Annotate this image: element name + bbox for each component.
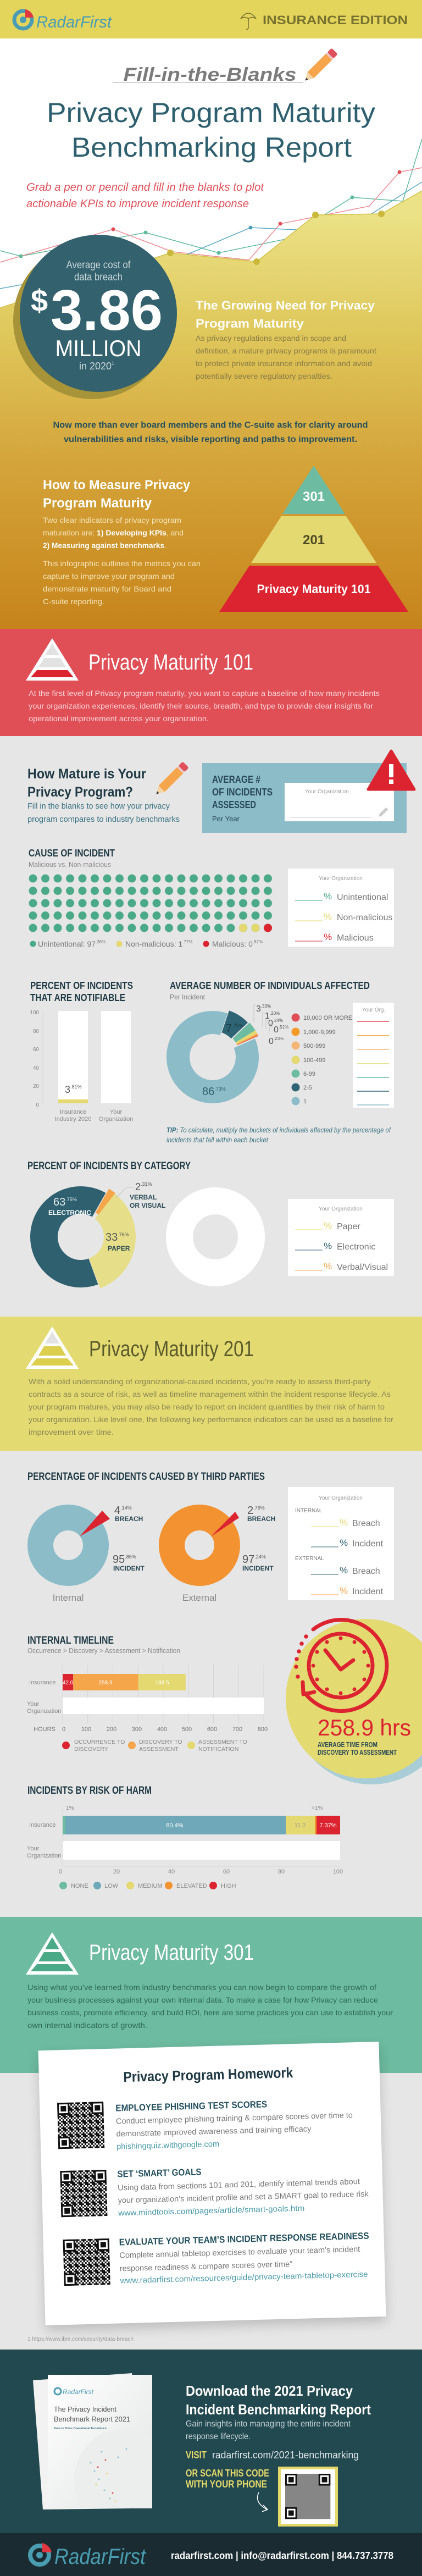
- chart: cause of incident dot grid: .87%: [253, 939, 263, 944]
- text block: how to measure: demonstrate maturity for Board and: [43, 584, 171, 593]
- chart: internal donut: BREACH: [115, 1515, 143, 1523]
- text block: how to measure: Two clear indicators of privacy program: [43, 516, 181, 524]
- main title: Benchmarking Report: [71, 132, 352, 163]
- chart: cause of incident dot grid: CAUSE OF INCIDENT: [29, 848, 115, 859]
- chart: incidents by risk of harm: 7.37%: [319, 1822, 337, 1829]
- chart: cause of incident dot grid: Unintentional: 97: [38, 939, 96, 948]
- chart: average individuals affected donut: 86: [202, 1086, 214, 1098]
- arrow: [258, 2492, 268, 2512]
- panel: your organization cause: %: [324, 932, 332, 942]
- chart: internal timeline: 500: [182, 1726, 192, 1733]
- contact info: radarfirst.com | info@radarfirst.com | 844.737.3778: [171, 2550, 393, 2561]
- item: incident response readiness: response readiness & compare scores over time”: [120, 2260, 292, 2273]
- chart: incidents by risk of harm: 1%: [66, 1805, 74, 1811]
- item: incident response readiness: EVALUATE YOUR TEAM’S INCIDENT RESPONSE READINESS: [119, 2231, 369, 2247]
- chart: internal timeline: OCCURRENCE TO: [74, 1739, 125, 1745]
- section: 101 metrics: [0, 736, 422, 1317]
- callout: clock 258.9 hrs: 258.9 hrs: [318, 1715, 411, 1740]
- chart: incidents by category donut: VERBAL: [130, 1193, 157, 1201]
- text block: download: VISIT: [186, 2450, 207, 2461]
- legend: individuals buckets: 10,000 OR MORE: [303, 1015, 352, 1021]
- chart: percent notifiable bar chart: 0: [36, 1102, 39, 1108]
- chart: incidents by category donut: 63: [53, 1196, 65, 1208]
- heading: Privacy Maturity 201: [89, 1337, 254, 1361]
- panel: your organization cause: %: [324, 911, 332, 922]
- chart: internal timeline: 300: [132, 1726, 142, 1733]
- icon: warning triangle: [368, 751, 414, 789]
- chart: internal timeline: DISCOVERY TO: [139, 1739, 182, 1745]
- panel: average incidents assessed: Your Organization: [305, 789, 349, 795]
- title: fill-in-the-blanks: Fill-in-the-Blanks: [123, 64, 297, 85]
- heading: how mature: [27, 766, 180, 824]
- icon: pencil: [302, 48, 338, 84]
- text block: growing need: Program Maturity: [196, 317, 304, 330]
- heading: how mature: Privacy Program?: [27, 784, 133, 800]
- chart: percent notifiable bar chart: [30, 980, 133, 1123]
- item: phishing test scores: phishingquiz.withgoogle.com: [116, 2140, 219, 2152]
- legend: individuals buckets: 6-99: [303, 1071, 315, 1077]
- chart: internal timeline: NOTIFICATION: [198, 1746, 238, 1753]
- stat circle: $3.86 million: [13, 235, 177, 399]
- chart: incidents by category donut: ELECTRONIC: [48, 1209, 91, 1217]
- panel: your organization cause: [288, 869, 394, 947]
- intro text: your business processes against your own internal data. To make a case for how Privacy can reduce: [27, 1995, 378, 2004]
- chart: average individuals affected donut: 7: [226, 1022, 232, 1035]
- chart: average individuals affected donut: .73%: [214, 1086, 226, 1092]
- text block: how to measure: C-suite reporting.: [43, 597, 104, 606]
- chart: incidents by risk of harm: ELEVATED: [176, 1883, 207, 1889]
- intro text: operational improvement across your organization.: [29, 714, 209, 723]
- item: smart goals: your organization’s incident profile and set a SMART goal to reduce risk: [118, 2190, 369, 2205]
- stat circle: $3.86 million: data breach: [74, 272, 123, 283]
- booklet image: [33, 2373, 152, 2509]
- subtitle: [26, 181, 264, 210]
- text block: how to measure: maturation are: 1) Developing KPIs, and: [43, 528, 184, 537]
- chart: average individuals affected donut: .75%: [232, 1023, 243, 1029]
- chart: internal timeline: 200: [107, 1726, 116, 1733]
- main title: [47, 97, 375, 163]
- panel: your org third parties: Incident: [352, 1587, 384, 1596]
- text block: growing need: The Growing Need for Privacy: [196, 298, 375, 312]
- panel: your org third parties: Breach: [352, 1567, 380, 1576]
- subtitle: actionable KPIs to improve incident response: [26, 198, 249, 210]
- chart: incidents by risk of harm: 0: [59, 1869, 62, 1875]
- chart: external donut: INCIDENT: [242, 1565, 274, 1572]
- chart: internal timeline: [27, 1635, 268, 1753]
- chart: incidents by risk of harm: 11.2: [295, 1822, 306, 1829]
- chart: average individuals affected donut: [167, 980, 370, 1103]
- chart: internal timeline: Occurrence > Discovery > Assessment > Notification: [27, 1646, 180, 1655]
- chart: incidents by risk of harm: 40: [168, 1869, 175, 1875]
- chart: internal donut: .14%: [120, 1505, 132, 1511]
- heading: Privacy Program Homework: [123, 2064, 293, 2085]
- chart: incidents by category donut: 33: [106, 1231, 118, 1243]
- legend: individuals buckets: 100-499: [303, 1057, 325, 1064]
- panel: your organization cause: Non-malicious: [337, 913, 392, 922]
- item: smart goals: www.mindtools.com/pages/article/smart-goals.htm: [118, 2204, 304, 2218]
- chart: average individuals affected donut: .24%: [273, 1018, 283, 1023]
- chart: incidents by risk of harm: HIGH: [221, 1883, 236, 1889]
- chart: internal donut: INCIDENT: [113, 1565, 145, 1572]
- legend: individuals buckets: 500-999: [303, 1043, 325, 1049]
- intro text: business costs, promote efficiency, and build ROI, here are some practices you can use to establish your: [27, 2008, 393, 2017]
- intro text: [29, 1377, 393, 1436]
- chart: percent notifiable bar chart: 3: [65, 1084, 70, 1095]
- footer logo: RadarFirst: [54, 2545, 147, 2569]
- panel: your org category: Your Organization: [319, 1206, 363, 1212]
- section: homework background: [0, 2073, 422, 2350]
- section: privacy maturity 101 intro: [0, 629, 422, 736]
- item: incident response readiness: Complete annual tabletop exercises to evaluate your team’s incident: [119, 2245, 360, 2260]
- chart: incidents by category donut: .75%: [65, 1197, 77, 1202]
- callout: clock 258.9 hrs: DISCOVERY TO ASSESSMENT: [318, 1749, 397, 1756]
- pyramid diagram: 201: [303, 533, 325, 548]
- section: privacy maturity 201 intro: [0, 1317, 422, 1451]
- panel: your org individuals: [353, 1003, 394, 1108]
- panel: your org third parties: Breach: [352, 1519, 380, 1528]
- chart: internal timeline: 700: [232, 1726, 242, 1733]
- panel: your org third parties: INTERNAL: [295, 1508, 323, 1514]
- intro text: your organization. Like level one, the following key performance indicators can be used as a baseline for: [29, 1415, 393, 1424]
- item: smart goals: SET ‘SMART’ GOALS: [117, 2167, 202, 2180]
- item: phishing test scores: EMPLOYEE PHISHING TEST SCORES: [115, 2099, 268, 2114]
- icon: pencil: [153, 761, 189, 797]
- intro text: your organization experiences, identify their source, breadth, and type to provide clear insights for: [29, 701, 373, 710]
- intro text: contracts as a source of risk, as well as timeline management within the incident response lifecycle. As: [29, 1390, 391, 1398]
- intro text: your program matures, you may also be ready to report on incident quantities by their risk of harm to: [29, 1402, 385, 1411]
- main title: Privacy Program Maturity: [47, 97, 375, 128]
- stat circle: $3.86 million: in 2020: [79, 361, 112, 372]
- edition label with umbrella icon: [241, 13, 408, 29]
- footer logo: [30, 2543, 147, 2569]
- chart: average individuals affected donut: .33%: [261, 1004, 271, 1009]
- stat circle: $3.86 million: Average cost of: [66, 259, 131, 271]
- section: download report: [0, 2350, 422, 2533]
- panel: your org third parties: Incident: [352, 1539, 384, 1549]
- chart: percent notifiable bar chart: 40: [33, 1065, 39, 1071]
- booklet image: Data to Drive Operational Excellence: [54, 2427, 107, 2430]
- chart: incidents by risk of harm: 100: [333, 1869, 343, 1875]
- chart: percent notifiable bar chart: THAT ARE NOTIFIABLE: [30, 992, 125, 1003]
- chart: incidents by risk of harm: INCIDENTS BY RISK OF HARM: [27, 1785, 152, 1796]
- chart: incidents by risk of harm: [27, 1785, 343, 1889]
- panel: your org category: %: [324, 1241, 332, 1251]
- panel: your org third parties: EXTERNAL: [295, 1556, 324, 1562]
- chart: cause of incident dot grid: [27, 848, 274, 948]
- chart: internal timeline: 258.9: [98, 1680, 113, 1686]
- callout: clock 258.9 hrs: AVERAGE TIME FROM: [318, 1741, 377, 1749]
- text block: how to measure: capture to improve your program and: [43, 572, 175, 581]
- chart: incidents by category donut: .31%: [141, 1181, 152, 1187]
- chart: average individuals affected donut: .23%: [274, 1036, 284, 1041]
- chart: average individuals affected donut: 3: [256, 1004, 261, 1014]
- chart: internal timeline: DISCOVERY: [74, 1746, 108, 1753]
- panel: your organization cause: Your Organization: [319, 876, 363, 882]
- chart: internal donut: .86%: [125, 1554, 136, 1560]
- chart: average individuals affected donut: 0: [274, 1025, 279, 1035]
- chart: external donut: External: [182, 1593, 216, 1603]
- chart: incidents by category donut: OR VISUAL: [130, 1202, 165, 1209]
- tip text: [166, 1126, 391, 1144]
- chart: internal timeline: 800: [258, 1726, 268, 1733]
- chart: percent notifiable bar chart: PERCENT OF INCIDENTS: [30, 980, 133, 991]
- text block: growing need: to protect private insurance information and avoid: [196, 359, 372, 368]
- panel: average incidents assessed: OF INCIDENTS: [212, 787, 273, 798]
- chart: percent notifiable bar chart: 60: [33, 1047, 39, 1053]
- logo: RadarFirst: [36, 13, 113, 31]
- chart: external donut: 97: [242, 1554, 254, 1566]
- chart: internal timeline: 400: [157, 1726, 167, 1733]
- text block: download: WITH YOUR PHONE: [186, 2479, 267, 2490]
- footnote: 1 https://www.ibm.com/security/data-breach: [27, 2336, 134, 2342]
- panel: your org individuals: Your Org.: [362, 1007, 385, 1013]
- text block: growing need: As privacy regulations expand in scope and: [196, 334, 346, 342]
- panel: your org category: [288, 1199, 394, 1276]
- panel: your org category: Paper: [337, 1222, 360, 1231]
- chart: percent notifiable bar chart: 100: [30, 1010, 39, 1016]
- chart: average individuals affected donut: 0: [269, 1037, 274, 1046]
- text block: download: response lifecycle.: [186, 2432, 251, 2441]
- panel: your organization cause: Unintentional: [337, 893, 388, 902]
- text block: how to measure: 2) Measuring against benchmarks.: [43, 541, 166, 550]
- text block: download: Gain insights into managing the entire incident: [186, 2419, 351, 2429]
- chart: incidents by category donut: 2: [135, 1181, 141, 1192]
- chart: cause of incident dot grid: .77%: [182, 939, 192, 944]
- chart: percent notifiable bar chart: 20: [33, 1084, 39, 1090]
- subtitle: Grab a pen or pencil and fill in the blanks to plot: [26, 181, 264, 194]
- item: phishing test scores: Conduct employee phishing training & compare scores over time to: [116, 2111, 353, 2126]
- chart: incidents by category donut: .76%: [118, 1232, 129, 1237]
- chart: average individuals affected donut: AVERAGE NUMBER OF INDIVIDUALS AFFECTED: [170, 980, 370, 991]
- chart: external donut: BREACH: [247, 1515, 275, 1523]
- chart: external donut: .76%: [253, 1505, 265, 1511]
- chart: average individuals affected donut: .20%: [270, 1011, 280, 1016]
- text block: how to measure: [43, 478, 201, 606]
- chart: incidents by risk of harm: Organization: [27, 1853, 61, 1859]
- section: 201 metrics: [0, 1451, 422, 1917]
- logo: [14, 9, 113, 31]
- hero section: [0, 0, 422, 629]
- chart: cause of incident dot grid: Non-malicious: 1: [125, 939, 182, 948]
- chart: internal timeline: ASSESSMENT: [139, 1746, 179, 1753]
- chart: incidents by category donut: PERCENT OF INCIDENTS BY CATEGORY: [27, 1160, 191, 1172]
- stat circle: $3.86 million: MILLION: [55, 335, 142, 361]
- legend: individuals buckets: [291, 1014, 352, 1105]
- callout: board members: vulnerabilities and risks, visible reporting and paths to improvement.: [64, 435, 357, 444]
- item: phishing test scores: [57, 2095, 353, 2153]
- panel: your org category: %: [324, 1220, 332, 1231]
- panel: your org third parties: %: [340, 1517, 348, 1528]
- panel: your org third parties: %: [340, 1585, 348, 1596]
- intro text: own internal indicators of growth.: [27, 2021, 147, 2030]
- item: smart goals: [60, 2163, 369, 2219]
- icon: pyramid 201: [26, 1326, 79, 1369]
- intro text: At the first level of Privacy program maturity, you want to capture a baseline of how many incidents: [29, 689, 380, 698]
- intro text: With a solid understanding of organizational-caused incidents, you’re ready to assess third-party: [29, 1377, 371, 1386]
- pyramid diagram: Privacy Maturity 101: [257, 582, 370, 596]
- chart: internal timeline: 100: [81, 1726, 91, 1733]
- chart: percent notifiable bar chart: Organization: [99, 1116, 133, 1123]
- icon: pyramid 301: [26, 1932, 79, 1975]
- chart: external donut: 2: [247, 1505, 253, 1517]
- text block: how to measure: How to Measure Privacy: [43, 478, 191, 493]
- text block: download: [186, 2382, 371, 2490]
- chart: cause of incident dot grid: .36%: [96, 939, 106, 944]
- heading: Privacy Maturity 301: [89, 1941, 254, 1965]
- heading: third parties: PERCENTAGE OF INCIDENTS CAUSED BY THIRD PARTIES: [27, 1471, 265, 1483]
- chart: cause of incident dot grid: Malicious: 0: [212, 939, 253, 948]
- booklet image: Benchmark Report 2021: [54, 2415, 130, 2423]
- chart: internal donut: [41, 1505, 145, 1603]
- chart: external donut: [171, 1505, 275, 1603]
- chart: incidents by risk of harm: 20: [113, 1869, 120, 1875]
- text block: growing need: [196, 298, 376, 380]
- panel: your org third parties: [288, 1487, 394, 1600]
- stat circle: $3.86 million: 1: [112, 361, 114, 366]
- chart: internal timeline: HOURS: [34, 1726, 55, 1733]
- section: privacy maturity 301 intro: [0, 1917, 422, 2073]
- pyramid diagram: 301: [303, 489, 325, 504]
- header bar: [0, 0, 422, 38]
- panel: your org category: Verbal/Visual: [337, 1263, 388, 1272]
- qr code: [278, 2467, 338, 2527]
- item: incident response readiness: www.radarfirst.com/resources/guide/privacy-team-tabletop-exercise: [119, 2270, 368, 2285]
- panel: average incidents assessed: Per Year: [212, 815, 240, 823]
- chart: incidents by category donut: PAPER: [108, 1245, 130, 1252]
- intro text: [27, 1983, 393, 2030]
- item: smart goals: Using data from sections 101 and 201, identify internal trends about: [118, 2177, 360, 2192]
- panel: your org category: Electronic: [337, 1242, 375, 1252]
- stat circle: $3.86 million: $: [31, 283, 48, 318]
- chart: incidents by risk of harm: 80.4%: [166, 1822, 184, 1829]
- chart: external donut: .24%: [254, 1554, 266, 1560]
- booklet image: RadarFirst: [63, 2388, 94, 2396]
- panel: average incidents assessed: AVERAGE #: [212, 774, 260, 785]
- heading: how mature: How Mature is Your: [27, 766, 146, 782]
- item: incident response readiness: [63, 2231, 370, 2287]
- chart: internal timeline: 0: [62, 1726, 65, 1733]
- panel: your org third parties: Your Organization: [319, 1495, 363, 1501]
- intro text: [29, 689, 380, 723]
- chart: internal timeline: 42.0: [63, 1680, 74, 1686]
- edition label with umbrella icon: INSURANCE EDITION: [263, 13, 408, 27]
- pyramid diagram: [219, 466, 408, 612]
- panel: average incidents assessed: [202, 763, 407, 833]
- chart: internal donut: 4: [114, 1505, 120, 1517]
- chart: average individuals affected donut: Per Incident: [170, 993, 205, 1001]
- heading: Privacy Maturity 101: [88, 650, 253, 675]
- callout: board members: [53, 421, 368, 444]
- chart: internal timeline: Insurance: [29, 1679, 55, 1686]
- chart: incidents by risk of harm: MEDIUM: [138, 1883, 163, 1889]
- chart: incidents by risk of harm: Your: [27, 1845, 40, 1852]
- heading: how mature: program compares to industry benchmarks: [27, 815, 180, 824]
- legend: individuals buckets: 1: [303, 1098, 307, 1105]
- chart: percent notifiable bar chart: Industry 2020: [55, 1116, 91, 1123]
- chart: internal timeline: ASSESSMENT TO: [198, 1739, 247, 1745]
- text block: download: Download the 2021 Privacy: [186, 2382, 353, 2399]
- icon: pyramid 101: [26, 638, 79, 681]
- callout: clock 258.9 hrs: [286, 1619, 422, 1784]
- footer: [0, 2533, 422, 2576]
- chart: internal timeline: INTERNAL TIMELINE: [27, 1635, 114, 1646]
- intro text: improvement over time.: [29, 1428, 114, 1436]
- chart: internal donut: Internal: [53, 1593, 84, 1603]
- chart: percent notifiable bar chart: .81%: [70, 1084, 82, 1090]
- panel: your org third parties: %: [340, 1565, 348, 1576]
- chart: internal timeline: 188.5: [155, 1680, 169, 1686]
- text block: growing need: definition, a mature privacy programs is paramount: [196, 346, 376, 355]
- panel: average incidents assessed: ASSESSED: [212, 799, 256, 810]
- panel: your organization cause: Malicious: [337, 933, 374, 943]
- intro text: Using what you’ve learned from industry benchmarks you can now begin to compare the growth of: [27, 1983, 376, 1992]
- chart: percent notifiable bar chart: 80: [33, 1029, 39, 1035]
- booklet image: The Privacy Incident: [54, 2405, 116, 2413]
- text block: how to measure: This infographic outlines the metrics you can: [43, 559, 201, 568]
- chart: percent notifiable bar chart: Insurance: [60, 1109, 86, 1115]
- chart: blank donut for your organization: [179, 1201, 252, 1273]
- chart: internal timeline: 600: [207, 1726, 217, 1733]
- chart: internal timeline: Your: [27, 1701, 40, 1707]
- text block: how to measure: Program Maturity: [43, 496, 152, 511]
- tip text: TIP: To calculate, multiply the buckets of individuals affected by the percentage of: [166, 1126, 391, 1134]
- chart: internal timeline: Organization: [27, 1708, 61, 1715]
- stat circle: $3.86 million: 3.86: [51, 279, 163, 342]
- chart: incidents by risk of harm: Insurance: [29, 1822, 55, 1828]
- chart: incidents by risk of harm: 60: [223, 1869, 230, 1875]
- line chart decoration: [0, 139, 422, 629]
- chart: average individuals affected donut: .51%: [279, 1025, 288, 1030]
- callout: board members: Now more than ever board members and the C-suite ask for clarity around: [53, 421, 368, 430]
- text block: download: OR SCAN THIS CODE: [186, 2468, 269, 2479]
- text block: growing need: potentially severe regulatory penalties.: [196, 372, 332, 380]
- heading: how mature: Fill in the blanks to see how your privacy: [27, 801, 170, 811]
- panel: your org third parties: %: [340, 1538, 348, 1548]
- chart: internal donut: 95: [113, 1554, 125, 1566]
- panel: your org category: %: [324, 1261, 332, 1272]
- chart: incidents by risk of harm: LOW: [104, 1883, 119, 1889]
- chart: incidents by risk of harm: NONE: [71, 1883, 88, 1889]
- chart: average individuals affected donut: 1: [265, 1011, 270, 1021]
- text block: download: radarfirst.com/2021-benchmarking: [212, 2450, 359, 2461]
- chart: incidents by risk of harm: >1%: [312, 1805, 323, 1811]
- panel: privacy program homework card: [38, 2042, 386, 2325]
- chart: cause of incident dot grid: Malicious vs. Non-malicious: [29, 860, 111, 869]
- chart: incidents by risk of harm: 80: [278, 1869, 285, 1875]
- chart: average individuals affected donut: 0: [268, 1019, 273, 1028]
- tip text: incidents that fall within each bucket: [166, 1136, 269, 1144]
- chart: incidents by category donut: [26, 1160, 191, 1292]
- text block: download: Incident Benchmarking Report: [186, 2401, 371, 2418]
- legend: individuals buckets: 2-5: [303, 1085, 312, 1091]
- legend: individuals buckets: 1,000-9,999: [303, 1029, 336, 1036]
- item: phishing test scores: demonstrate improved awareness and training efficacy: [116, 2125, 312, 2139]
- chart: percent notifiable bar chart: Your: [110, 1109, 122, 1115]
- panel: your organization cause: %: [324, 891, 332, 902]
